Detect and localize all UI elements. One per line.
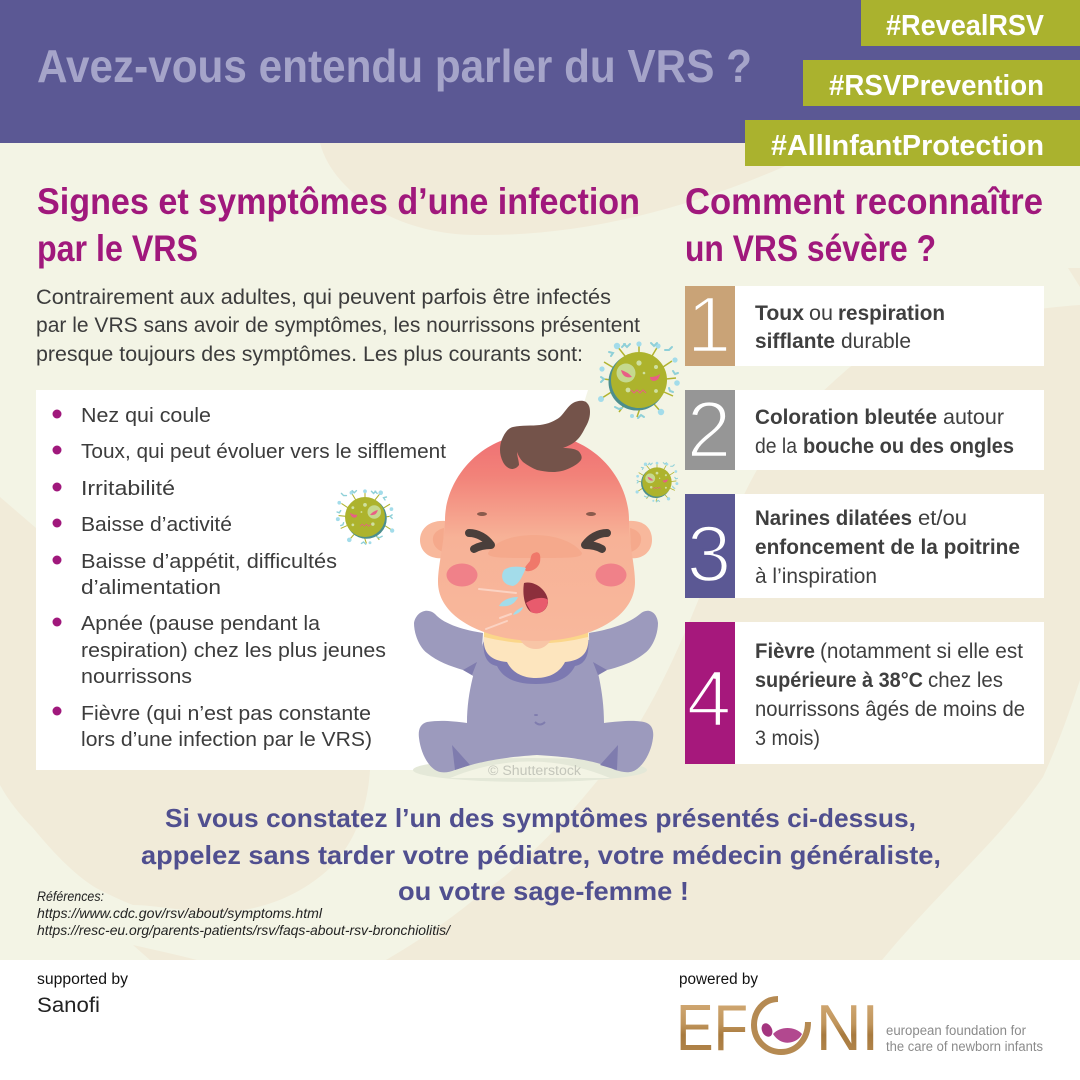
card 4: chez les: [928, 669, 1003, 692]
baby left arm: [414, 611, 483, 680]
card 3: Narines dilatées: [755, 507, 912, 530]
intro paragraph: presque toujours des symptômes. Les plus courants sont:: [36, 343, 583, 366]
call to action: ou votre sage-femme !: [398, 876, 689, 906]
supported by: [37, 971, 128, 1017]
panel: symptoms list: [36, 390, 588, 770]
card 3: 3: [687, 509, 731, 598]
bullet: appétit: [52, 550, 337, 599]
bullet: apnée: respiration) chez les plus jeunes: [81, 639, 386, 662]
heading: comment reconnaître: un VRS sévère ?: [685, 228, 936, 269]
baby clothing shadows: [452, 662, 618, 770]
title: Avez-vous entendu parler du VRS ?: [37, 40, 752, 92]
references: Références:: [37, 888, 104, 904]
intro paragraph: Contrairement aux adultes, qui peuvent parfois être infectés: [36, 286, 611, 309]
card 1: sifflante: [755, 330, 835, 353]
card 2: autour: [943, 406, 1004, 429]
icon: virus left: [336, 489, 394, 544]
card 2: bouche ou des ongles: [803, 435, 1014, 458]
card 4: supérieure à 38°C: [755, 669, 923, 692]
references: https://www.cdc.gov/rsv/about/symptoms.html: [37, 905, 323, 921]
hashtag: AllInfantProtection: [745, 120, 1080, 166]
hashtag: AllInfantProtection: #AllInfantProtection: [771, 130, 1044, 162]
heading: signes et symptômes: Signes et symptômes d’une infection: [37, 181, 640, 222]
bullet: toux: Toux, qui peut évoluer vers le sifflement: [81, 440, 446, 463]
card 3: enfoncement de la poitrine: [755, 536, 1020, 559]
references: [37, 888, 452, 938]
heading: comment reconnaître: Comment reconnaître: [685, 181, 1043, 222]
card 1: durable: [841, 330, 911, 353]
card 4: [685, 622, 1044, 764]
baby nose band: [488, 535, 582, 558]
card 4: 3 mois): [755, 727, 820, 750]
heading: signes et symptômes: par le VRS: [37, 228, 198, 269]
baby hair: [500, 401, 590, 472]
card 2: 2: [687, 385, 731, 474]
card 4: Fièvre: [755, 640, 815, 663]
logo: EFCNI: EF: [676, 991, 748, 1064]
card 1: 1: [687, 280, 731, 369]
intro paragraph: par le VRS sans avoir de symptômes, les nourrissons présentent: [36, 314, 640, 337]
card 1: ou: [809, 302, 833, 325]
bullet: appétit: Baisse d’appétit, difficultés: [81, 550, 337, 573]
baby cheeks: [446, 564, 478, 586]
card 2: Coloration bleutée: [755, 406, 937, 429]
watermark: © Shutterstock: [488, 763, 581, 778]
bullet: fièvre: Fièvre (qui n’est pas constante: [81, 702, 371, 725]
logo: EFCNI: [676, 991, 1043, 1064]
bullet: apnée: [52, 612, 386, 688]
bullet: apnée: nourrissons: [81, 665, 192, 688]
baby runny nose: [525, 552, 540, 571]
footer band: [0, 960, 1080, 1080]
supported by: Sanofi: [37, 994, 100, 1017]
bullet: irritabilité: [52, 477, 175, 500]
card 2: [685, 385, 1044, 474]
supported by: supported by: [37, 971, 128, 988]
card 3: à l’inspiration: [755, 565, 877, 588]
heading: comment reconnaître: [685, 181, 1043, 269]
intro paragraph: [36, 286, 640, 366]
card 1: respiration: [838, 302, 945, 325]
logo: EFCNI: NI: [816, 991, 879, 1064]
card 1: [685, 280, 1044, 369]
hashtag: RSVPrevention: #RSVPrevention: [829, 70, 1044, 102]
card 4: (notamment si elle est: [820, 640, 1023, 663]
logo: EFCNI: the care of newborn infants: [886, 1039, 1043, 1054]
card 3: et/ou: [918, 507, 967, 530]
bullet: irritabilité: Irritabilité: [81, 477, 175, 500]
card 4: nourrissons âgés de moins de: [755, 698, 1025, 721]
illustration: crying baby: [413, 401, 658, 782]
bullet: fièvre: lors d’une infection par le VRS): [81, 728, 372, 751]
card 1: Toux: [755, 302, 804, 325]
call to action: [141, 803, 941, 906]
baby mouth: [523, 582, 548, 613]
bullet: nez: Nez qui coule: [81, 404, 211, 427]
hashtag: RevealRSV: [861, 0, 1080, 46]
heading: signes et symptômes: [37, 181, 640, 269]
card 4: 4: [687, 654, 731, 743]
call to action: appelez sans tarder votre pédiatre, votre médecin généraliste,: [141, 840, 941, 870]
call to action: Si vous constatez l’un des symptômes présentés ci-dessus,: [165, 803, 916, 833]
bullet: appétit: d’alimentation: [81, 576, 221, 599]
bullet: fièvre: [52, 702, 372, 751]
baby eyes: [469, 533, 607, 549]
bullet: activité: Baisse d’activité: [81, 513, 232, 536]
references: https://resc-eu.org/parents-patients/rsv/faqs-about-rsv-bronchiolitis/: [37, 922, 452, 938]
powered by: powered by: [679, 971, 758, 988]
bullet: apnée: Apnée (pause pendant la: [81, 612, 321, 635]
baby head: [438, 434, 635, 641]
header band: [0, 0, 1080, 143]
baby bib: [484, 636, 588, 684]
baby right arm: [589, 611, 658, 680]
card 3: [685, 494, 1044, 598]
icon: virus small right: [636, 462, 678, 502]
hashtag: RSVPrevention: [803, 60, 1080, 106]
hashtag: RevealRSV: #RevealRSV: [886, 10, 1045, 42]
logo: EFCNI: european foundation for: [886, 1023, 1026, 1038]
card 2: de la: [755, 435, 797, 458]
baby ears: [420, 521, 445, 558]
baby body and legs: [419, 640, 653, 772]
icon: virus large: [598, 341, 680, 418]
